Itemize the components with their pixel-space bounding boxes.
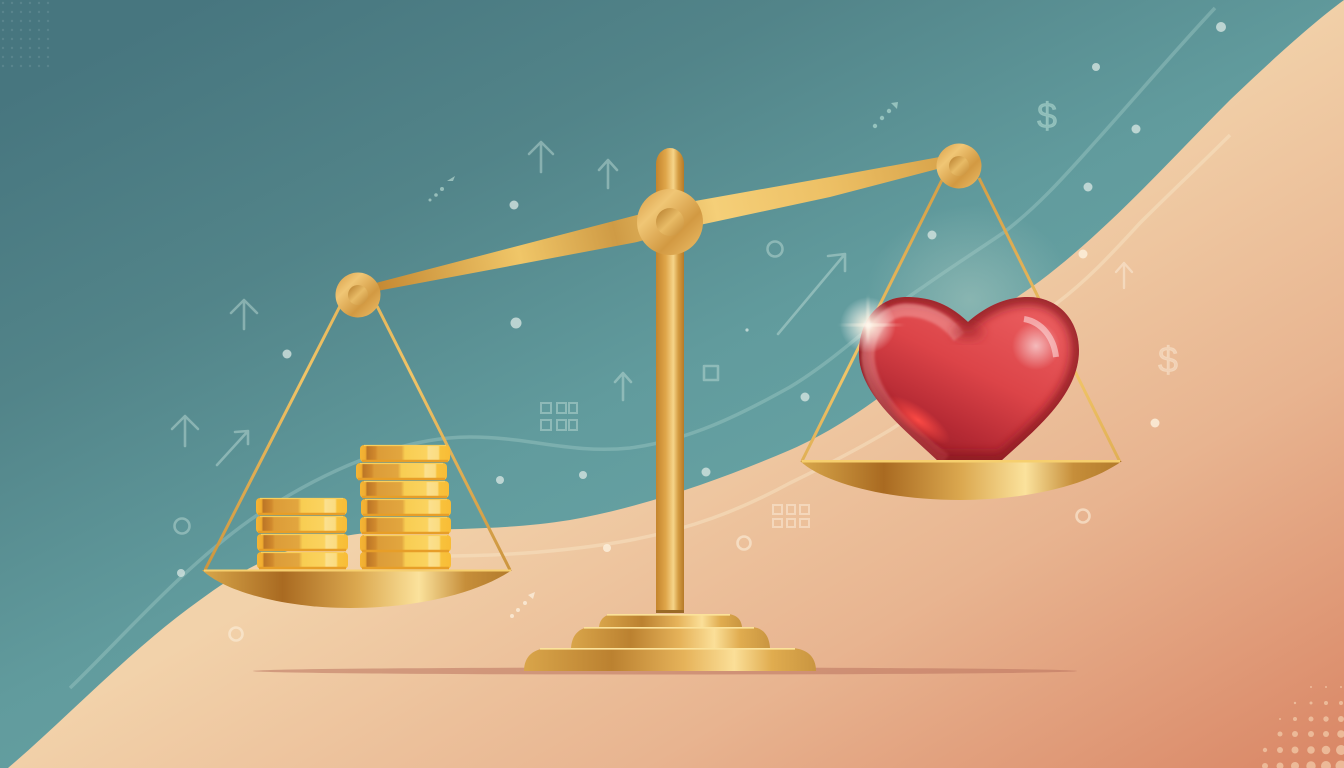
dotted arrow upper left: [428, 176, 455, 202]
scattered dots on teal: [177, 22, 1226, 577]
icon: up arrow 5: [615, 373, 631, 400]
right hub: [936, 144, 982, 188]
base pedestal: [524, 614, 816, 671]
decorative icons: [172, 142, 845, 534]
icon: up arrow 3: [231, 300, 257, 329]
heart right gloss arc: [1024, 319, 1056, 357]
icon: square outline: [704, 366, 718, 380]
scattered dots on peach: [603, 250, 1160, 552]
dotted arrow on peach: [510, 592, 535, 618]
heart gloss band: [868, 310, 959, 460]
heart: [859, 297, 1079, 460]
left hub: [336, 272, 380, 318]
dotted arrow upper right: [873, 102, 898, 128]
heart cleft shadow: [952, 324, 984, 340]
icon: ring centre: [768, 242, 782, 256]
dollar sign top right: $: [1037, 95, 1057, 136]
icon: diagonal arrow left: [217, 431, 248, 465]
glow behind heart: [865, 205, 1075, 395]
central pole: [656, 148, 684, 612]
left hanger strings: [205, 306, 510, 570]
coin stack: tall: [356, 445, 451, 569]
icon: diagonal arrow centre: [778, 254, 845, 334]
icon: ring left: [174, 518, 190, 534]
right pan: [800, 460, 1122, 500]
heart lower red glow: [890, 398, 946, 442]
halftone dots: bottom right: [1262, 686, 1344, 768]
upward trend line on teal: [70, 8, 1215, 688]
icon: up arrow 4: [172, 416, 198, 446]
heart dark edge: [859, 297, 1079, 460]
pole foot shadow: [656, 610, 684, 613]
balance scale: [205, 144, 1120, 671]
ground shadow: [253, 668, 1077, 674]
left pan: [202, 570, 512, 608]
sparkle on heart: [838, 295, 905, 353]
tall stack coin edges: [358, 461, 449, 568]
icon: up arrow 1: [529, 142, 553, 172]
icon: up arrow on peach: [1116, 263, 1132, 288]
trend line on peach: [440, 135, 1230, 556]
beam: [372, 156, 945, 292]
right hanger strings: [802, 178, 1120, 462]
icon: data grid on teal: [541, 403, 577, 430]
icon: rings on peach: [230, 510, 1090, 640]
dollar sign on peach: $: [1158, 339, 1178, 380]
heart right specular spot: [1014, 324, 1058, 368]
icon: up arrow 2: [599, 160, 617, 188]
centre hub: [637, 189, 703, 255]
short stack coin edges: [258, 514, 346, 568]
icon: data grid on peach: [773, 505, 809, 527]
coin stack: short: [256, 498, 348, 569]
halftone dots: top left: [0, 0, 52, 70]
